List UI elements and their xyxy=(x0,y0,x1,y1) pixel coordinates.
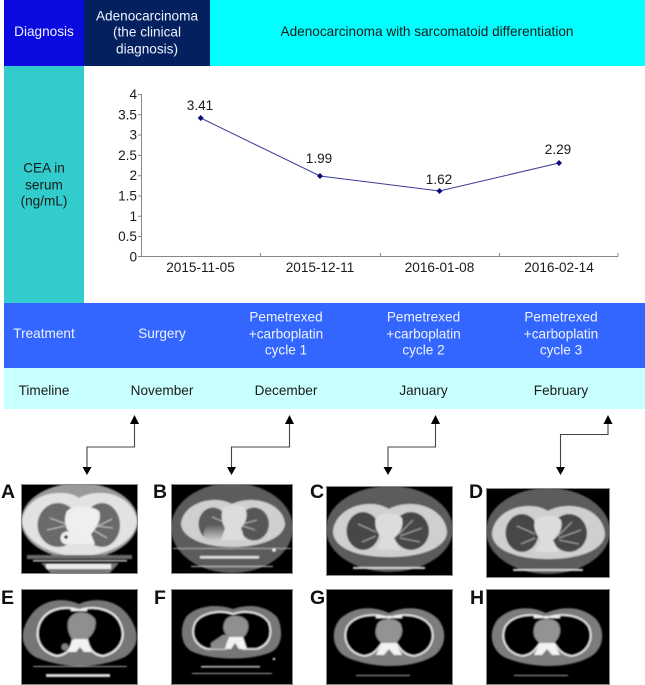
CT scan E xyxy=(21,589,138,685)
y axis labels: 1 xyxy=(129,209,137,224)
data labels: 1.99 xyxy=(306,151,332,166)
data labels: 2.29 xyxy=(545,142,571,157)
x axis xyxy=(142,253,618,256)
cycle 1: +carboplatin xyxy=(249,326,323,341)
panel labels: B xyxy=(153,481,167,503)
y axis xyxy=(138,94,142,256)
final diagnosis cell xyxy=(210,0,645,66)
band: treatment row xyxy=(4,303,645,368)
y axis labels: 2 xyxy=(129,168,137,183)
x axis labels: 2016-01-08 xyxy=(405,260,474,275)
data labels xyxy=(187,98,571,187)
band: timeline row xyxy=(4,368,645,409)
cycle 1: Pemetrexed xyxy=(249,309,323,324)
y axis labels xyxy=(118,87,137,264)
y axis labels: 2.5 xyxy=(118,148,137,163)
clinical diagnosis cell: diagnosis) xyxy=(116,41,178,56)
January: January xyxy=(399,383,448,398)
panel labels: F xyxy=(154,587,166,609)
CT scan A xyxy=(21,483,138,574)
treatment label: Treatment xyxy=(13,326,75,341)
y axis labels: 1.5 xyxy=(118,188,137,204)
arrow: C to January xyxy=(384,415,440,475)
panel: CEA label: CEA in xyxy=(23,160,65,175)
CT scan F xyxy=(171,589,293,685)
band: diagnosis row xyxy=(4,0,645,66)
arrow: D to February xyxy=(556,415,612,475)
clinical diagnosis cell xyxy=(84,0,210,66)
panel labels: H xyxy=(470,587,484,609)
y axis labels: 4 xyxy=(129,87,137,102)
cycle 3: cycle 3 xyxy=(540,342,582,357)
arrow: B to December xyxy=(227,415,294,475)
y axis labels: 0.5 xyxy=(118,229,137,244)
cycle 3 xyxy=(524,309,598,358)
CT scan G xyxy=(326,589,453,685)
cycle 3: +carboplatin xyxy=(524,326,598,341)
final diagnosis cell: Adenocarcinoma with sarcomatoid differentiation xyxy=(281,24,573,39)
timeline label: Timeline xyxy=(19,383,69,398)
x axis labels: 2015-12-11 xyxy=(286,260,354,275)
cycle 2: +carboplatin xyxy=(386,326,461,341)
x axis labels: 2015-11-05 xyxy=(166,260,235,275)
x axis labels xyxy=(166,260,594,275)
panel labels xyxy=(1,481,484,609)
cycle 1 xyxy=(249,309,323,358)
cycle 2 xyxy=(386,309,461,358)
panel: CEA label: (ng/mL) xyxy=(21,193,67,208)
line chart: CEA in serum xyxy=(118,87,618,275)
cycle 1: cycle 1 xyxy=(265,342,307,357)
diagnosis label cell xyxy=(4,0,84,66)
cycle 2: Pemetrexed xyxy=(387,309,460,324)
clinical diagnosis cell: (the clinical xyxy=(113,24,181,39)
data labels: 1.62 xyxy=(426,172,452,187)
panel labels: G xyxy=(310,587,325,609)
diagnosis label cell: Diagnosis xyxy=(14,24,74,39)
November: November xyxy=(131,383,193,398)
y axis labels: 3.5 xyxy=(118,108,137,122)
surgery: Surgery xyxy=(138,326,186,341)
CT scan D xyxy=(486,488,610,578)
clinical diagnosis cell: Adenocarcinoma xyxy=(96,8,198,23)
data labels: 3.41 xyxy=(187,98,213,113)
panel labels: C xyxy=(310,481,324,503)
panel labels: E xyxy=(1,587,14,609)
arrow: A to November xyxy=(82,415,139,475)
data line xyxy=(198,115,562,194)
panel: CEA label xyxy=(4,66,84,303)
panel labels: D xyxy=(469,481,483,503)
cycle 2: cycle 2 xyxy=(402,342,445,357)
panel: CEA label: serum xyxy=(25,177,63,192)
CT scan H xyxy=(486,589,610,685)
y axis labels: 3 xyxy=(129,128,137,142)
CT scan C xyxy=(326,486,453,576)
y axis labels: 0 xyxy=(129,250,137,264)
panel labels: A xyxy=(1,481,15,503)
December: December xyxy=(255,383,317,398)
x axis labels: 2016-02-14 xyxy=(524,260,594,275)
February: February xyxy=(534,383,588,398)
cycle 3: Pemetrexed xyxy=(524,309,598,324)
CT scan B xyxy=(171,483,293,574)
